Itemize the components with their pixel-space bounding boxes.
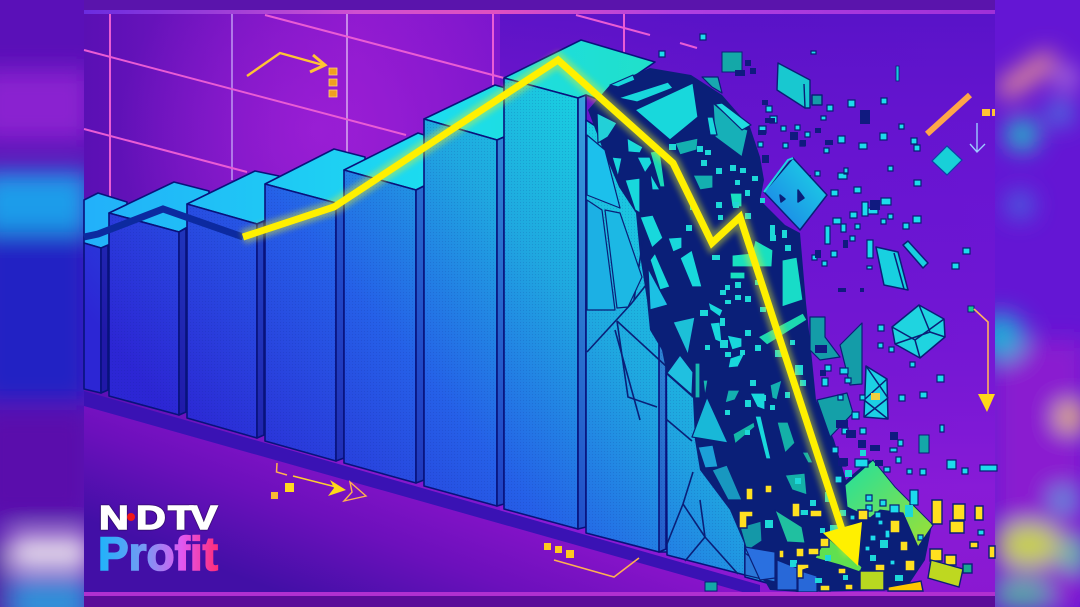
floating debris: tilted box	[777, 63, 822, 108]
panel: blurred right side	[977, 0, 1080, 607]
shattered fragments	[587, 75, 862, 592]
floating debris: large diamond	[764, 158, 827, 230]
floating debris: slab	[876, 241, 928, 290]
yellow trend line: glow	[243, 60, 850, 555]
logo red dot	[127, 513, 135, 521]
column 5	[344, 133, 440, 483]
hatched debris	[705, 52, 929, 591]
panel: blurred left side	[0, 0, 90, 607]
floor	[84, 391, 760, 597]
logo word Profit: Profit	[98, 527, 218, 580]
yellow squares top right	[982, 109, 995, 116]
orange stroke accent	[927, 95, 970, 134]
icon: floor arrow	[271, 463, 366, 501]
column 3	[187, 171, 279, 438]
yellow pixel debris	[739, 485, 995, 591]
column 4	[265, 149, 365, 461]
bottom border band	[84, 592, 995, 607]
column 8 cracked	[586, 120, 680, 552]
icon: thin down arrow	[970, 123, 985, 152]
cyan pixels inside dark mass	[669, 144, 913, 583]
yellow trend line	[243, 60, 862, 566]
icon: bottom squares and bracket	[544, 543, 639, 577]
top border band	[84, 0, 995, 14]
texture: halftone dots on columns	[109, 78, 745, 575]
dark shattered mass	[588, 68, 932, 592]
column 10 cracked	[745, 520, 800, 592]
bar chart columns	[84, 40, 800, 592]
icon: structure fragment	[864, 366, 888, 419]
column 1	[84, 193, 127, 393]
green debris	[775, 460, 933, 572]
icon: yellow down arrow	[968, 306, 995, 412]
crack lines	[587, 225, 780, 590]
column 7	[504, 40, 655, 529]
dark pixel debris	[735, 60, 898, 466]
floating debris: cube	[892, 305, 945, 358]
floating debris: hatched diamond	[932, 146, 962, 175]
column 2	[109, 182, 209, 415]
column 9 cracked	[666, 300, 745, 575]
logo: NDTV Profit	[98, 499, 218, 580]
large yellow-green blocks	[860, 560, 972, 591]
yellow trend line: dark early segment	[84, 209, 243, 237]
cyan pixel debris	[659, 34, 997, 565]
background grid	[84, 14, 697, 200]
logo wordmark NDTV: NDTV	[99, 499, 218, 536]
small floating bar	[896, 66, 899, 81]
column 6	[424, 85, 520, 506]
icon: rising arrow with squares	[247, 53, 337, 97]
